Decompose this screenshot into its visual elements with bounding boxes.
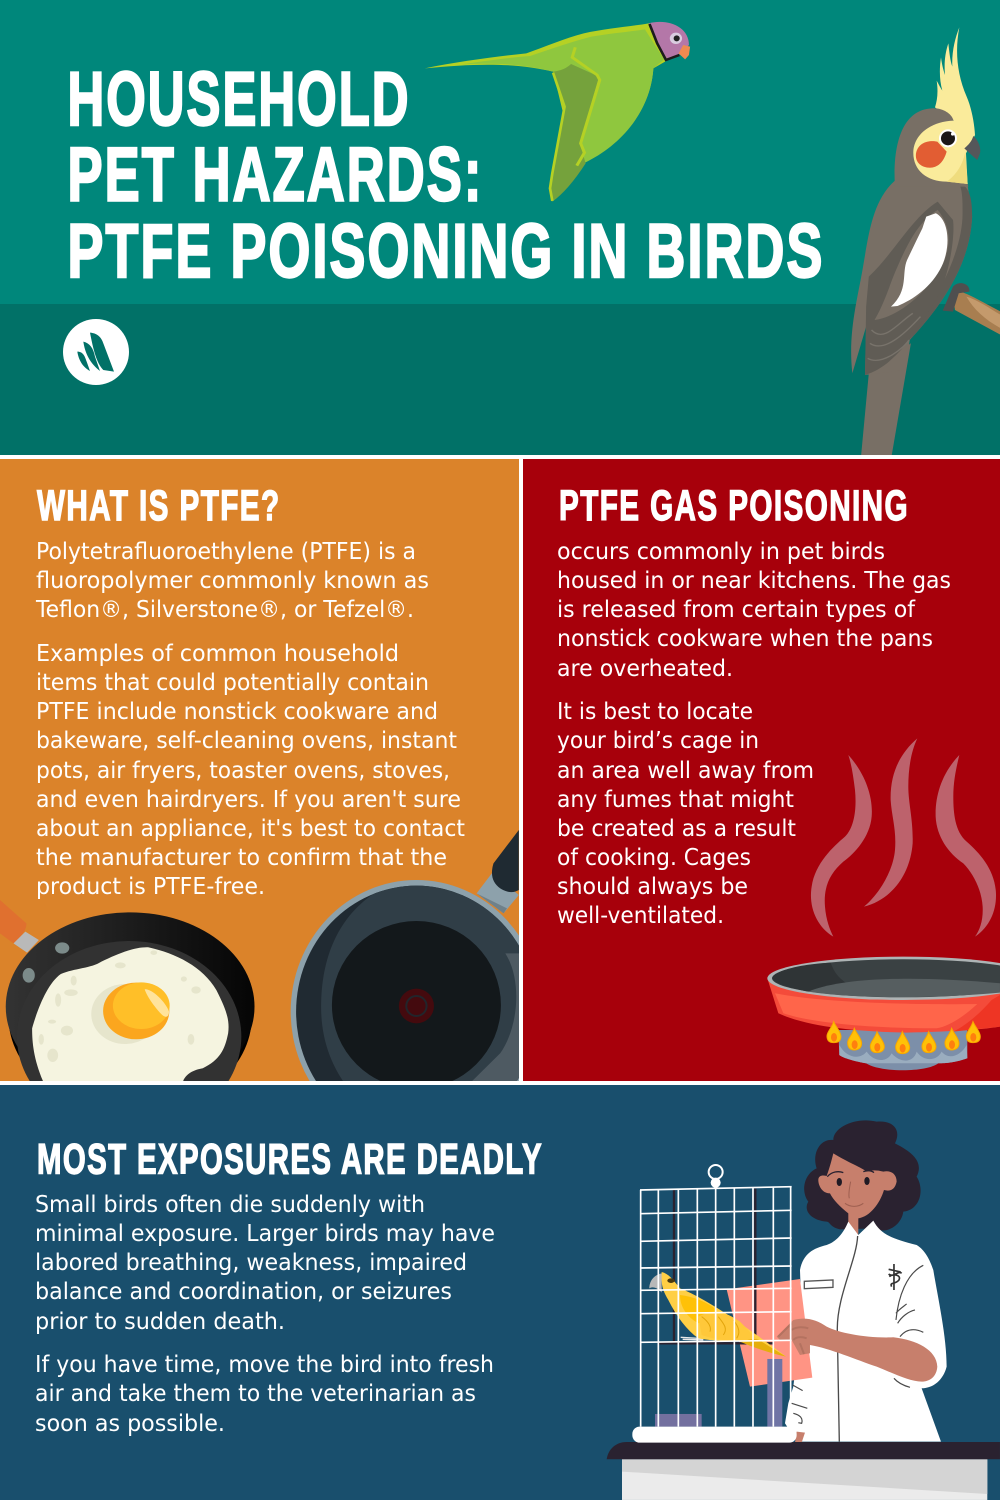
text block: how poisoning occurs [557,537,951,682]
icon: empty nonstick pan [290,830,519,1081]
text block: how poisoning occurs: occurs commonly in pet birds [557,537,885,565]
text block: household examples [36,639,465,900]
icon: steam fumes [811,738,996,937]
text block: cage location advice: be created as a result [557,814,796,842]
text block: symptoms: minimal exposure. Larger birds may have [35,1219,495,1247]
text block: symptoms: balance and coordination, or seizures [35,1277,452,1305]
icon: green parrot in flight [425,22,690,202]
panel: most exposures are deadly [0,1085,1000,1500]
text block: cage location advice: your bird’s cage in [557,726,759,754]
perch branch [953,291,1000,335]
counter table [607,1442,1000,1500]
text block: what to do: If you have time, move the bird into fresh [35,1350,494,1378]
icon: logo [63,319,129,385]
text block: household examples: items that could potentially contain [36,668,429,696]
text block: household examples: about an appliance, it's best to contact [36,814,465,842]
text block: what to do: soon as possible. [35,1409,225,1437]
title: HOUSEHOLD [68,57,410,142]
veterinarian [727,1120,947,1443]
icon: veterinarian with caged bird [607,1120,1000,1500]
text block: household examples: product is PTFE-free. [36,872,265,900]
text block: household examples: pots, air fryers, toaster ovens, stoves, [36,756,450,784]
text block: cage location advice: It is best to locate [557,697,753,725]
text block: PTFE definition: Polytetrafluoroethylene (PTFE) is a [36,537,416,565]
text block: what to do: air and take them to the veterinarian as [35,1379,476,1407]
text block: what to do [35,1350,494,1437]
icon: pan on gas burner [767,957,1000,1070]
text block: how poisoning occurs: are overheated. [557,654,733,682]
text block: cage location advice: any fumes that might [557,785,794,813]
text block: cage location advice: well-ventilated. [557,901,724,929]
icon: cockatiel on perch [851,27,1000,455]
text block: symptoms: labored breathing, weakness, impaired [35,1248,467,1276]
text block: PTFE definition [35,537,429,623]
panel: what is PTFE [0,459,519,1081]
title: PET HAZARDS: [68,132,484,217]
panel: header [0,0,1000,455]
text block: household examples: bakeware, self-cleaning ovens, instant [36,726,457,754]
yellow bird [649,1272,786,1357]
text block: how poisoning occurs: housed in or near kitchens. The gas [557,566,951,594]
text block: cage location advice [557,697,814,929]
icon: frying pan with egg [0,900,254,1081]
cage with yellow bird [632,1165,797,1443]
text block: how poisoning occurs: nonstick cookware when the pans [557,624,933,652]
panel: PTFE gas poisoning [523,459,1000,1081]
text block: cage location advice: should always be [557,872,748,900]
heading: what is PTFE: WHAT IS PTFE? [37,483,280,530]
text block: household examples: PTFE include nonstick cookware and [36,697,438,725]
text block: cage location advice: an area well away from [557,756,814,784]
text block: household examples: and even hairdryers. If you aren't sure [36,785,461,813]
text block: household examples: Examples of common household [36,639,399,667]
text block: cage location advice: of cooking. Cages [557,843,751,871]
text block: PTFE definition: Teflon®, Silverstone®, or Tefzel®. [35,595,414,623]
text block: household examples: the manufacturer to confirm that the [36,843,447,871]
text block: symptoms: Small birds often die suddenly with [35,1190,425,1218]
text block: symptoms [35,1190,495,1335]
text block: PTFE definition: fluoropolymer commonly known as [36,566,429,594]
title [70,70,822,279]
text block: symptoms: prior to sudden death. [35,1307,285,1335]
heading: most exposures are deadly: MOST EXPOSURES ARE DEADLY [37,1136,543,1184]
text block: how poisoning occurs: is released from certain types of [557,595,916,623]
